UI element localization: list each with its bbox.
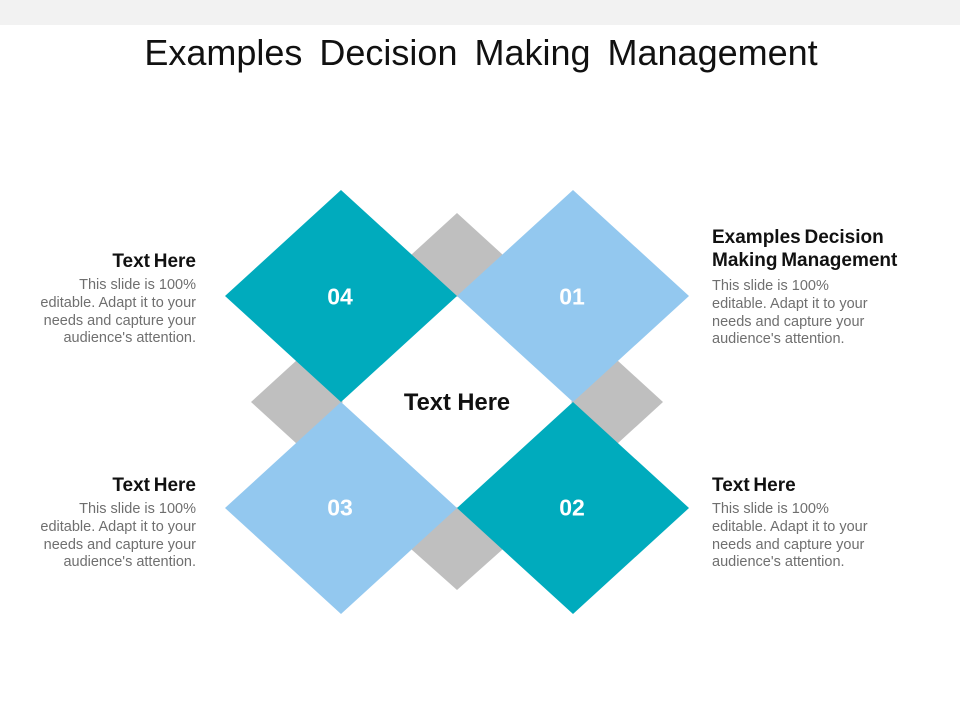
text block bottom right: audience's attention.	[712, 554, 845, 570]
diamond 02: 02	[559, 494, 585, 520]
text block top left: Text Here	[112, 251, 196, 272]
text block top right	[712, 227, 898, 347]
text block bottom right: needs and capture your	[712, 537, 864, 553]
diamond 04: 04	[327, 284, 353, 310]
text block bottom right: editable. Adapt it to your	[712, 519, 868, 535]
text block bottom right: Text Here	[712, 475, 796, 496]
text block bottom right	[712, 475, 868, 570]
text block bottom left: needs and capture your	[44, 537, 196, 553]
text block top right: This slide is 100%	[712, 278, 829, 294]
text block top left: needs and capture your	[44, 313, 196, 329]
text block bottom right: This slide is 100%	[712, 501, 829, 517]
diamond 03: 03	[327, 494, 353, 520]
diamond 01: 01	[559, 284, 585, 310]
grey diamond top	[411, 213, 503, 297]
text block top right: needs and capture your	[712, 314, 864, 330]
text block top right: editable. Adapt it to your	[712, 296, 868, 312]
center label: Text Here	[404, 390, 510, 416]
diamond 02	[457, 402, 689, 614]
text block top left: editable. Adapt it to your	[40, 295, 196, 311]
diamond 04	[225, 190, 457, 402]
diamond 01	[457, 190, 689, 402]
grey diamond left	[251, 360, 343, 444]
grey diamond bottom	[411, 507, 503, 590]
grey diamond right	[571, 360, 663, 444]
text block bottom left: Text Here	[112, 475, 196, 496]
text block top left: This slide is 100%	[79, 277, 196, 293]
text block bottom left: audience's attention.	[63, 554, 196, 570]
text block top right: Making Management	[712, 250, 897, 271]
text block bottom left: This slide is 100%	[79, 501, 196, 517]
diamond 03	[225, 402, 457, 614]
text block bottom left: editable. Adapt it to your	[40, 519, 196, 535]
text block top right: Examples Decision	[712, 227, 884, 248]
text block top right: audience's attention.	[712, 331, 845, 347]
text block top left	[40, 251, 196, 346]
text block bottom left	[40, 475, 196, 570]
title: Examples Decision Making Management	[144, 32, 818, 73]
top band	[0, 0, 960, 25]
text block top left: audience's attention.	[63, 330, 196, 346]
